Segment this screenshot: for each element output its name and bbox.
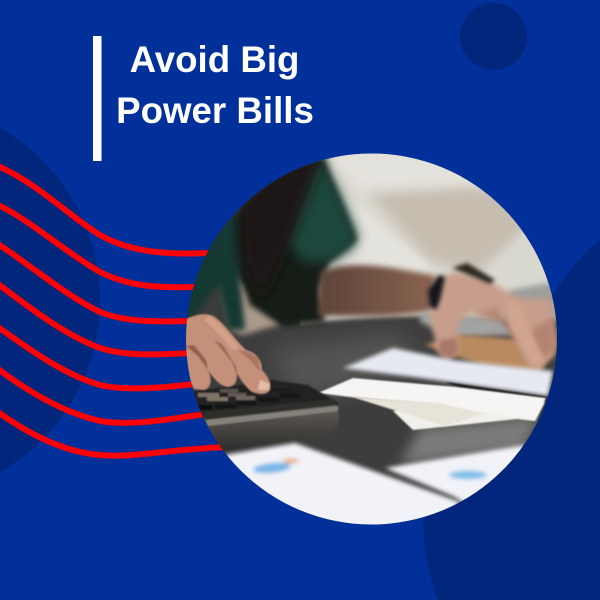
wave 3: [0, 244, 190, 321]
decorative circle: top right: [460, 3, 527, 70]
wave 6: [0, 369, 205, 423]
wave 1: [0, 166, 210, 254]
photo: arm: [318, 265, 436, 316]
watch strap: [452, 263, 495, 284]
circular photo: hands with calculator and bills: [180, 145, 570, 535]
photo: wooden clipboard: [425, 335, 556, 372]
calculator keys: [196, 381, 300, 410]
photo background: blurred room: [300, 145, 570, 335]
title accent bar: [93, 36, 102, 161]
wave 5: [0, 327, 195, 388]
photo: desk lit area lower right: [400, 415, 540, 465]
red wavy lines: [0, 166, 225, 456]
watch: [428, 275, 445, 310]
title line 2: Power Bills: [116, 90, 314, 131]
decorative circle: left: [0, 102, 100, 498]
photo: bottom-left paper with chart: [225, 443, 460, 535]
photo: left hand pressing key: [184, 314, 271, 394]
photo: beige chair behind person: [220, 277, 282, 335]
wave 2: [0, 205, 195, 287]
decorative shape: bottom right: [423, 240, 600, 600]
wave 7: [0, 412, 225, 456]
photo: bottom-right paper with chart: [385, 445, 530, 508]
title line 1: Avoid Big: [130, 39, 299, 80]
title: [116, 39, 314, 131]
photo: grey item behind fingers: [420, 312, 515, 338]
photo: desk highlight: [270, 332, 420, 395]
photo: paper stack on desk: [318, 348, 553, 430]
photo: person in dark green shirt: [180, 150, 358, 330]
wave 4: [0, 284, 190, 354]
photo: right hand with watch: [428, 263, 556, 369]
photo: calculator: [190, 380, 339, 452]
photo: dark desk: [180, 316, 565, 530]
